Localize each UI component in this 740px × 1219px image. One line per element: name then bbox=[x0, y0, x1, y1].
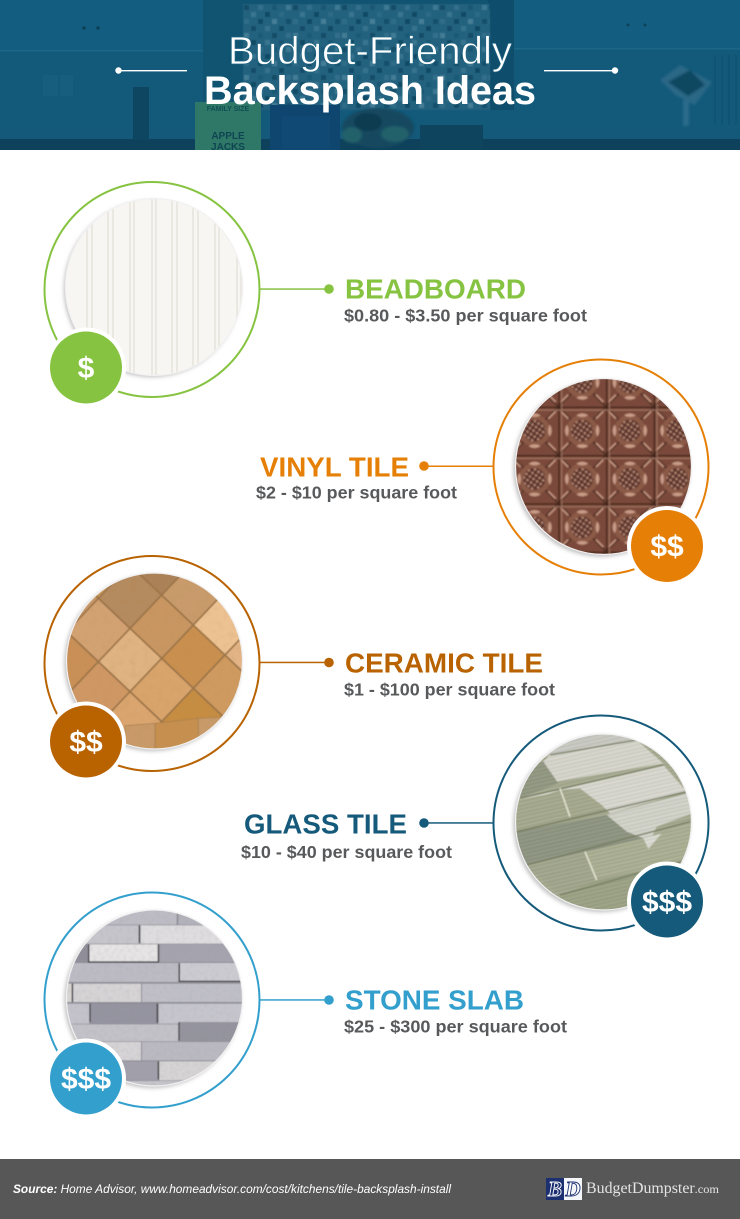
logo bbox=[546, 1177, 720, 1201]
shadow bbox=[64, 912, 240, 1088]
panel: glass tile bbox=[241, 716, 708, 942]
copper tile photo bbox=[516, 379, 691, 554]
connector bbox=[260, 658, 334, 667]
badge knockout bbox=[627, 862, 707, 942]
logo: D bbox=[564, 1177, 581, 1201]
price badge: $$$ bbox=[642, 886, 692, 919]
price badge: $$ bbox=[69, 726, 103, 759]
price: $10 - $40 per square foot bbox=[241, 842, 452, 862]
price badge bbox=[50, 1042, 122, 1114]
connector bbox=[419, 818, 493, 828]
price badge bbox=[631, 510, 703, 582]
connector bbox=[260, 995, 334, 1005]
logo: BudgetDumpster.com bbox=[586, 1180, 720, 1197]
connector bbox=[260, 284, 334, 294]
shadow bbox=[514, 380, 690, 556]
price badge bbox=[50, 332, 122, 404]
price badge bbox=[50, 706, 122, 778]
panel: ceramic tile bbox=[44, 555, 555, 778]
source text: Source: Home Advisor, www.homeadvisor.com/cost/kitchens/tile-backsplash-install bbox=[13, 1182, 451, 1196]
beadboard photo bbox=[66, 199, 242, 375]
title line 1: Budget-Friendly bbox=[228, 30, 513, 73]
badge knockout bbox=[46, 328, 126, 408]
logo: B bbox=[547, 1177, 562, 1201]
header banner bbox=[0, 0, 740, 153]
price: $2 - $10 per square foot bbox=[256, 482, 457, 502]
ring bbox=[494, 716, 708, 930]
ceramic tile photo bbox=[67, 574, 242, 748]
panel: beadboard bbox=[44, 182, 587, 408]
ring bbox=[44, 182, 260, 397]
badge knockout bbox=[46, 1038, 126, 1118]
header kitchen photo bbox=[0, 0, 740, 153]
price: $25 - $300 per square foot bbox=[344, 1016, 567, 1036]
price badge: $$$ bbox=[61, 1063, 111, 1096]
rim bbox=[66, 573, 242, 749]
heading: STONE SLAB bbox=[345, 984, 524, 1016]
shadow bbox=[64, 575, 240, 751]
glass tile photo bbox=[516, 734, 691, 910]
rim bbox=[516, 378, 692, 554]
header kitchen photo: APPLE bbox=[211, 131, 245, 142]
price badge: $$ bbox=[650, 530, 684, 564]
heading: GLASS TILE bbox=[244, 808, 407, 840]
price badge: $ bbox=[78, 352, 95, 385]
footer bbox=[0, 1159, 740, 1219]
price: $1 - $100 per square foot bbox=[344, 680, 555, 700]
shadow bbox=[64, 201, 240, 377]
shadow bbox=[514, 736, 690, 912]
ring bbox=[44, 892, 260, 1108]
footer bar bbox=[0, 1159, 740, 1219]
price: $0.80 - $3.50 per square foot bbox=[344, 306, 587, 326]
badge knockout bbox=[46, 702, 126, 782]
price badge bbox=[631, 866, 703, 938]
rim bbox=[66, 910, 242, 1086]
stone photo bbox=[67, 910, 242, 1085]
badge knockout bbox=[627, 506, 707, 586]
title line 2: Backsplash Ideas bbox=[204, 69, 536, 113]
heading: VINYL TILE bbox=[260, 452, 409, 482]
rim bbox=[66, 198, 242, 376]
panel: stone slab bbox=[44, 892, 567, 1118]
ring bbox=[494, 360, 708, 574]
panel: vinyl tile bbox=[256, 360, 708, 586]
heading: BEADBOARD bbox=[345, 274, 526, 304]
header kitchen photo: JACKS bbox=[211, 142, 245, 153]
right title rule bbox=[544, 67, 618, 74]
connector bbox=[419, 461, 493, 471]
heading: CERAMIC TILE bbox=[345, 648, 543, 678]
ring bbox=[44, 556, 260, 771]
left title rule bbox=[115, 67, 187, 74]
rim bbox=[516, 734, 692, 910]
header kitchen photo: FAMILY SIZE bbox=[207, 106, 250, 113]
